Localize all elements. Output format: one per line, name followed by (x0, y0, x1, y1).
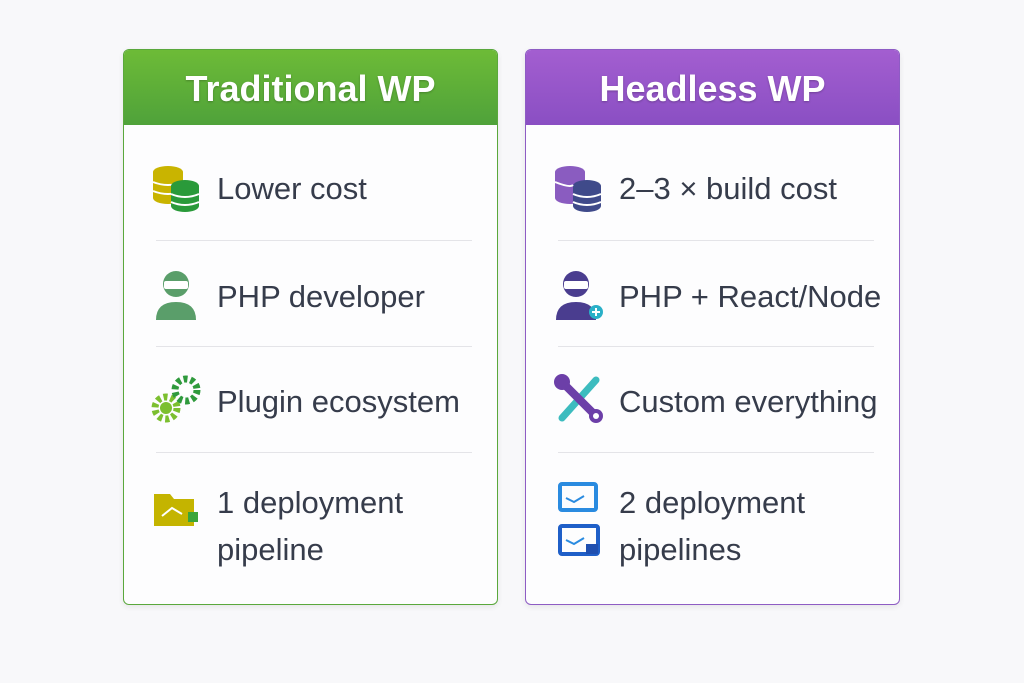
icon: gears (152, 376, 200, 422)
text: custom everything: Custom everything (619, 384, 877, 419)
text: lower cost: Lower cost (217, 171, 367, 206)
text: plugin ecosystem: Plugin ecosystem (217, 384, 460, 419)
icon: two windows (558, 482, 600, 556)
row: PHP developer (156, 271, 425, 320)
text: build cost: 2–3 × build cost (619, 171, 837, 206)
icon: developer plus (556, 271, 603, 320)
text: PHP + React/Node: PHP + React/Node (619, 279, 881, 314)
icon: coins (153, 166, 199, 212)
row: lower cost (153, 166, 367, 212)
text: 2 deployment pipelines: 2 deployment (619, 485, 805, 520)
row: PHP + React/Node (556, 271, 881, 320)
row: 2 deployment pipelines (558, 482, 805, 567)
icon: pipeline folder (154, 494, 198, 526)
row: 1 deployment pipeline (154, 485, 403, 567)
heading: Headless WP (526, 50, 899, 125)
text: PHP developer: PHP developer (217, 279, 425, 314)
heading: Traditional WP (124, 50, 497, 125)
panel: headless WP (525, 49, 900, 605)
row: custom everything (554, 374, 877, 423)
row: plugin ecosystem (152, 376, 460, 422)
text: 1 deployment pipeline (217, 485, 403, 567)
text: 2 deployment pipelines (619, 485, 805, 567)
text: 1 deployment pipeline: pipeline (217, 532, 324, 567)
heading: Traditional WP: Traditional WP (185, 68, 436, 109)
text: 1 deployment pipeline: 1 deployment (217, 485, 403, 520)
heading: Headless WP: Headless WP (599, 68, 826, 109)
text: 2 deployment pipelines: pipelines (619, 532, 741, 567)
icon: coins purple (555, 166, 601, 212)
icon: developer (156, 271, 196, 320)
icon: wrench and pen (554, 374, 603, 423)
panel: traditional WP (123, 49, 498, 605)
row: build cost (555, 166, 837, 212)
